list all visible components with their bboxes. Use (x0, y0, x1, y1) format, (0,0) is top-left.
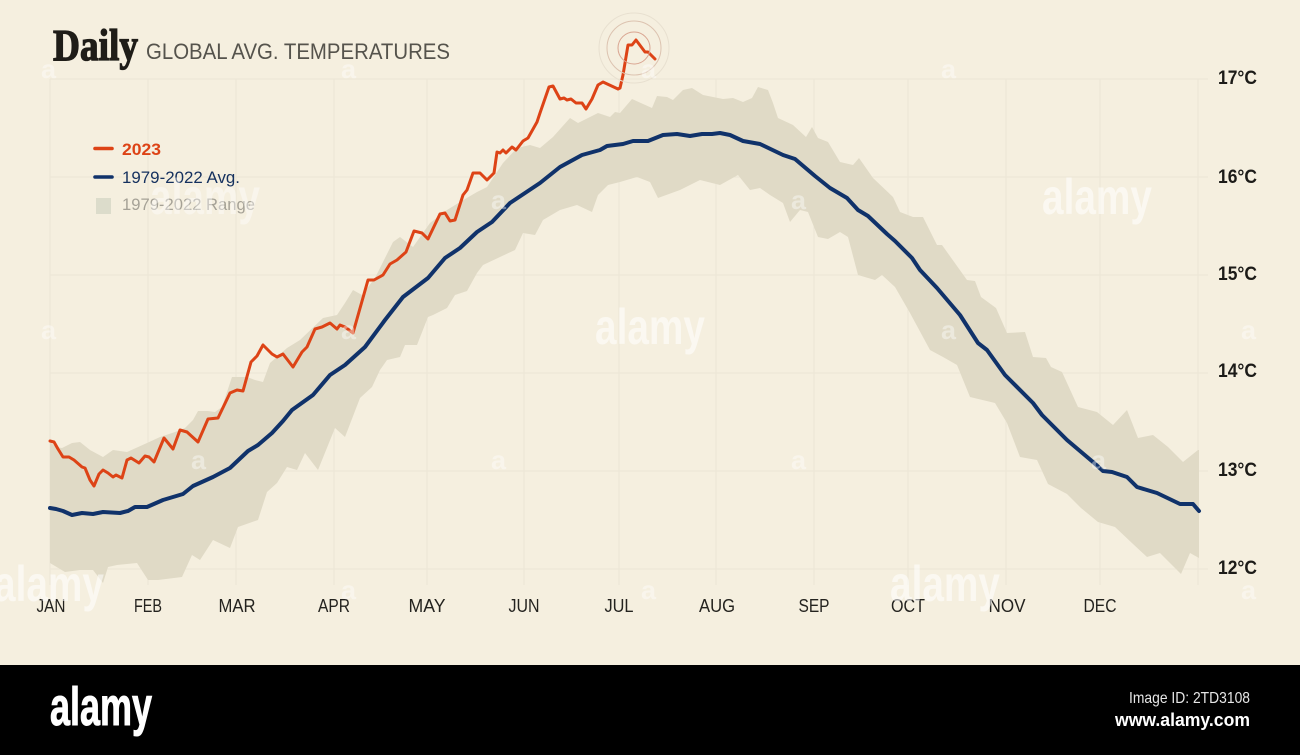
stock watermarks: a (1241, 575, 1257, 605)
footer image id: Image ID: 2TD3108 (1129, 690, 1250, 707)
stock watermarks: alamy (1042, 169, 1152, 225)
legend: 1979-2022 Range (122, 195, 255, 214)
stock watermarks: a (41, 315, 57, 345)
chart: 2023 temperature line (50, 40, 655, 486)
x axis month labels: DEC (1084, 596, 1116, 616)
y axis temperature labels: 17°C (1218, 68, 1257, 89)
x axis month labels: SEP (798, 596, 830, 616)
chart: 1979-2022 range band (50, 87, 1199, 583)
stock watermarks: a (641, 575, 657, 605)
x axis month labels (36, 596, 1116, 616)
y axis temperature labels: 15°C (1218, 264, 1257, 285)
stock watermarks (0, 54, 1257, 612)
stock watermarks: alamy (890, 556, 1000, 612)
x axis month labels: JUN (508, 596, 540, 616)
stock watermarks: a (1241, 315, 1257, 345)
y axis temperature labels: 12°C (1218, 558, 1257, 579)
stock watermarks: a (1091, 445, 1107, 475)
stock watermarks: a (791, 445, 807, 475)
x axis month labels: APR (318, 596, 350, 616)
title (53, 21, 450, 70)
y axis temperature labels: 14°C (1218, 361, 1257, 382)
chart: 1979-2022 average line (50, 133, 1199, 515)
footer bar (0, 665, 1300, 755)
stock watermarks: a (341, 315, 357, 345)
x axis month labels: JUL (604, 596, 634, 616)
x axis month labels: OCT (891, 596, 925, 616)
x axis month labels: FEB (134, 596, 162, 616)
stock watermarks: a (941, 315, 957, 345)
peak marker: concentric rings (599, 13, 669, 83)
y axis temperature labels: 13°C (1218, 460, 1257, 481)
stock watermarks: alamy (150, 169, 260, 225)
stock watermarks: a (41, 54, 57, 84)
legend: 2023 (122, 140, 161, 159)
stock watermarks: a (491, 445, 507, 475)
footer logo: alamy (50, 677, 152, 737)
title: Daily (53, 21, 138, 70)
y axis temperature labels: 16°C (1218, 167, 1257, 188)
stock watermarks: a (491, 185, 507, 215)
title: GLOBAL AVG. TEMPERATURES (146, 39, 450, 64)
legend (95, 140, 255, 214)
stock watermarks: a (791, 185, 807, 215)
legend: 1979-2022 Avg. (122, 168, 240, 187)
stock watermarks: a (341, 54, 357, 84)
stock watermarks: a (941, 54, 957, 84)
stock watermarks: a (191, 445, 207, 475)
x axis month labels: MAY (408, 596, 446, 616)
x axis month labels: JAN (36, 596, 66, 616)
stock watermarks: alamy (595, 299, 705, 355)
y axis temperature labels (1218, 68, 1257, 579)
stock watermarks: a (341, 575, 357, 605)
x axis month labels: MAR (218, 596, 256, 616)
stock watermarks: a (641, 54, 657, 84)
x axis month labels: AUG (699, 596, 735, 616)
x axis month labels: NOV (988, 596, 1026, 616)
footer url: www.alamy.com (1114, 710, 1250, 730)
